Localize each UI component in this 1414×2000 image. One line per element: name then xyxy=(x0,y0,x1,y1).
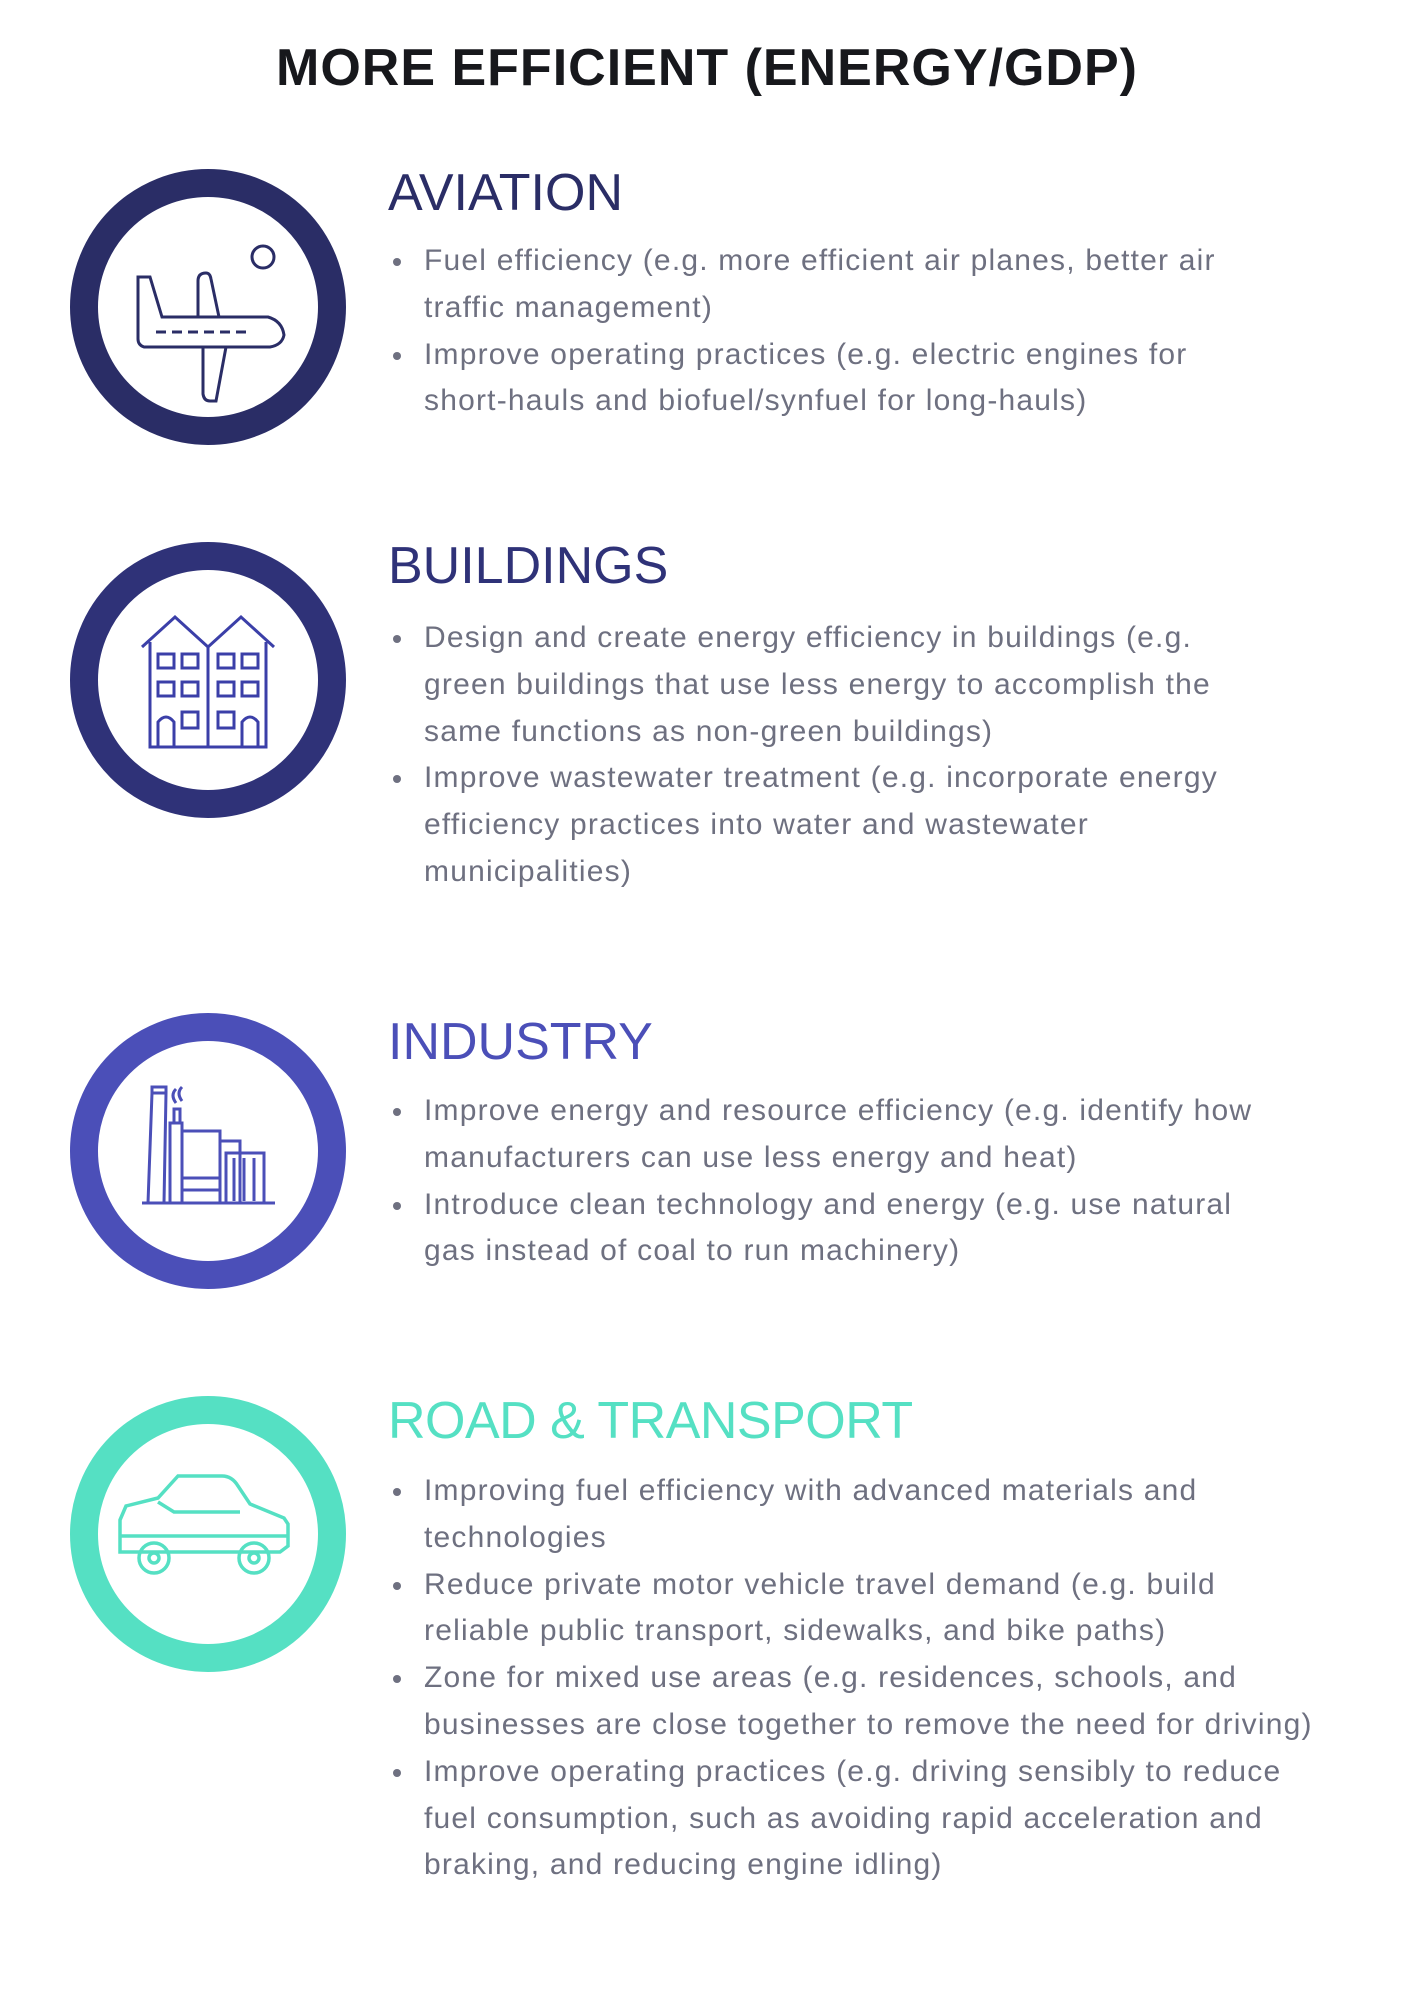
heading: buildings: BUILDINGS xyxy=(388,537,668,595)
text: aviation bullets xyxy=(393,244,1216,417)
icon: airplane circle xyxy=(70,169,346,445)
text: buildings bullets: same functions as non-green buildings) xyxy=(424,715,993,748)
icon: buildings circle xyxy=(70,542,346,818)
text: road bullets: Zone for mixed use areas (e.g. residences, schools, and xyxy=(424,1661,1237,1694)
text: industry bullets xyxy=(393,1094,1252,1267)
text: buildings bullets: Design and create energy efficiency in buildings (e.g. xyxy=(424,621,1192,654)
text: aviation bullets: Improve operating practices (e.g. electric engines for xyxy=(424,338,1187,371)
text: road bullets: braking, and reducing engine idling) xyxy=(424,1848,943,1881)
text: road bullets: Reduce private motor vehicle travel demand (e.g. build xyxy=(424,1568,1216,1601)
text: buildings bullets: efficiency practices into water and wastewater xyxy=(424,808,1089,841)
text: aviation bullets: traffic management) xyxy=(424,291,713,324)
text: buildings bullets: municipalities) xyxy=(424,855,632,888)
text: road bullets: Improve operating practices (e.g. driving sensibly to reduce xyxy=(424,1755,1281,1788)
text: road bullets: reliable public transport, sidewalks, and bike paths) xyxy=(424,1614,1166,1647)
heading: road & transport: ROAD & TRANSPORT xyxy=(388,1392,913,1450)
text: aviation bullets: Fuel efficiency (e.g. more efficient air planes, better air xyxy=(424,244,1216,277)
text: road bullets: businesses are close together to remove the need for driving) xyxy=(424,1708,1313,1741)
heading: aviation: AVIATION xyxy=(388,164,623,222)
text: buildings bullets: Improve wastewater treatment (e.g. incorporate energy xyxy=(424,761,1218,794)
text: industry bullets: Improve energy and resource efficiency (e.g. identify how xyxy=(424,1094,1252,1127)
heading: industry: INDUSTRY xyxy=(388,1013,653,1071)
text: road bullets: Improving fuel efficiency with advanced materials and xyxy=(424,1474,1197,1507)
text: buildings bullets: green buildings that use less energy to accomplish the xyxy=(424,668,1211,701)
text: buildings bullets xyxy=(393,621,1218,888)
text: industry bullets: gas instead of coal to run machinery) xyxy=(424,1234,960,1267)
text: aviation bullets: short-hauls and biofuel/synfuel for long-hauls) xyxy=(424,384,1087,417)
title: MORE EFFICIENT (ENERGY/GDP) xyxy=(276,39,1138,97)
text: road bullets: technologies xyxy=(424,1521,607,1554)
icon: car circle xyxy=(70,1396,346,1672)
text: road bullets: fuel consumption, such as avoiding rapid acceleration and xyxy=(424,1802,1263,1835)
text: industry bullets: manufacturers can use less energy and heat) xyxy=(424,1141,1078,1174)
text: industry bullets: Introduce clean technology and energy (e.g. use natural xyxy=(424,1188,1232,1221)
icon: industry circle xyxy=(70,1013,346,1289)
text: road bullets xyxy=(393,1474,1313,1881)
